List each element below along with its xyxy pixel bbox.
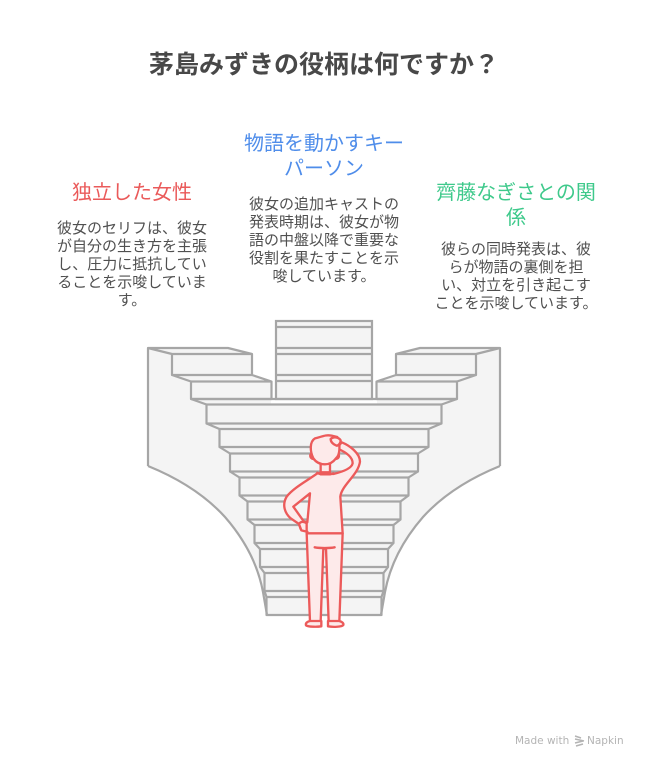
text: key person: 語の中盤以降で重要な [249, 232, 399, 249]
text: relationship with Saito Nagisa: ことを示唆しています。 [434, 295, 598, 312]
center tower [276, 321, 372, 399]
text: independent woman: が自分の生き方を主張 [57, 238, 207, 255]
text: relationship with Saito Nagisa: い、対立を引き起こす [441, 277, 591, 294]
text: relationship with Saito Nagisa: 彼らの同時発表は、彼 [441, 241, 591, 258]
heading: key person [244, 133, 404, 180]
outer staircase body [148, 348, 500, 615]
watermark: Made with Napkin: Made with [515, 735, 569, 747]
watermark: Made with Napkin [515, 735, 624, 747]
text: key person: 唆しています。 [272, 268, 376, 285]
heading: independent woman: 独立した女性 [72, 182, 192, 204]
heading: relationship with Saito Nagisa [436, 182, 596, 229]
text: independent woman: す。 [118, 292, 146, 309]
text: key person: 役割を果たすことを示 [249, 250, 399, 267]
watermark: Made with Napkin: Napkin [587, 735, 624, 747]
icon: person scratching head [284, 435, 360, 627]
text: independent woman: し、圧力に抵抗してい [57, 256, 207, 273]
heading: relationship with Saito Nagisa: 齊藤なぎさとの関 [436, 182, 596, 204]
heading: key person: 物語を動かすキー [244, 133, 404, 155]
text: key person: 発表時期は、彼女が物 [249, 214, 399, 231]
text: key person: 彼女の追加キャストの [249, 196, 399, 213]
text: independent woman: 彼女のセリフは、彼女 [57, 220, 207, 237]
stair steps [191, 399, 457, 615]
text: relationship with Saito Nagisa: らが物語の裏側を担 [448, 259, 584, 276]
title: 茅島みずきの役柄は何ですか？ [149, 51, 499, 79]
heading: key person: パーソン [284, 158, 364, 180]
text: relationship with Saito Nagisa [434, 241, 598, 312]
text: independent woman [57, 220, 207, 309]
text: key person [249, 196, 399, 285]
text: independent woman: ることを示唆していま [57, 274, 207, 291]
heading: relationship with Saito Nagisa: 係 [506, 207, 526, 229]
